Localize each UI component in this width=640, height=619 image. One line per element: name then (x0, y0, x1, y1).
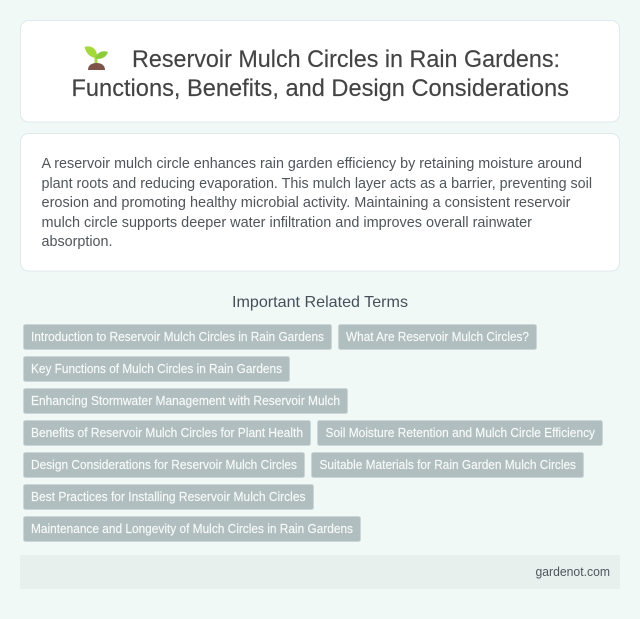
description text: absorption. (42, 233, 112, 250)
tag: best practices (24, 484, 314, 510)
tag: key functions (24, 356, 290, 382)
tag: design considerations: Design Considerations for Reservoir Mulch Circles (31, 457, 297, 472)
tag: soil moisture: Soil Moisture Retention and Mulch Circle Efficiency (326, 425, 596, 440)
footer source: gardenot.com (536, 565, 610, 579)
title (72, 46, 569, 102)
tag: key functions: Key Functions of Mulch Circles in Rain Gardens (31, 361, 282, 376)
tag: benefits (24, 420, 310, 446)
title: Functions, Benefits, and Design Considerations (72, 75, 569, 102)
tag: best practices: Best Practices for Installing Reservoir Mulch Circles (31, 489, 306, 504)
related terms tags (24, 324, 602, 542)
tag: suitable materials (312, 452, 584, 478)
description text (42, 155, 592, 250)
description text: mulch circle supports deeper water infiltration and improves overall rainwater (42, 214, 532, 231)
tag: benefits: Benefits of Reservoir Mulch Circles for Plant Health (31, 425, 303, 440)
tag: introduction (24, 324, 332, 350)
tag: what are (338, 324, 536, 350)
tag: maintenance: Maintenance and Longevity of Mulch Circles in Rain Gardens (31, 521, 353, 536)
tag: stormwater: Enhancing Stormwater Management with Reservoir Mulch (31, 393, 340, 408)
description text: plant roots and reducing evaporation. This mulch layer acts as a barrier, preventing soil (42, 175, 592, 192)
title: Reservoir Mulch Circles in Rain Gardens: (132, 46, 560, 73)
tag: soil moisture (318, 420, 602, 446)
tag: introduction: Introduction to Reservoir Mulch Circles in Rain Gardens (31, 329, 324, 344)
tag: what are: What Are Reservoir Mulch Circles? (346, 329, 529, 344)
description text: A reservoir mulch circle enhances rain garden efficiency by retaining moisture around (42, 155, 582, 172)
tag: maintenance (24, 516, 360, 542)
panel: description (20, 134, 620, 271)
footer (20, 555, 620, 589)
heading: related terms: Important Related Terms (232, 294, 408, 311)
tag: stormwater (24, 388, 348, 414)
panel: title card (20, 20, 620, 122)
tag: suitable materials: Suitable Materials for Rain Garden Mulch Circles (320, 457, 576, 472)
tag: design considerations (24, 452, 304, 478)
icon: seedling (84, 46, 108, 70)
description text: erosion and promoting healthy microbial activity. Maintaining a consistent reservoir (42, 194, 570, 211)
